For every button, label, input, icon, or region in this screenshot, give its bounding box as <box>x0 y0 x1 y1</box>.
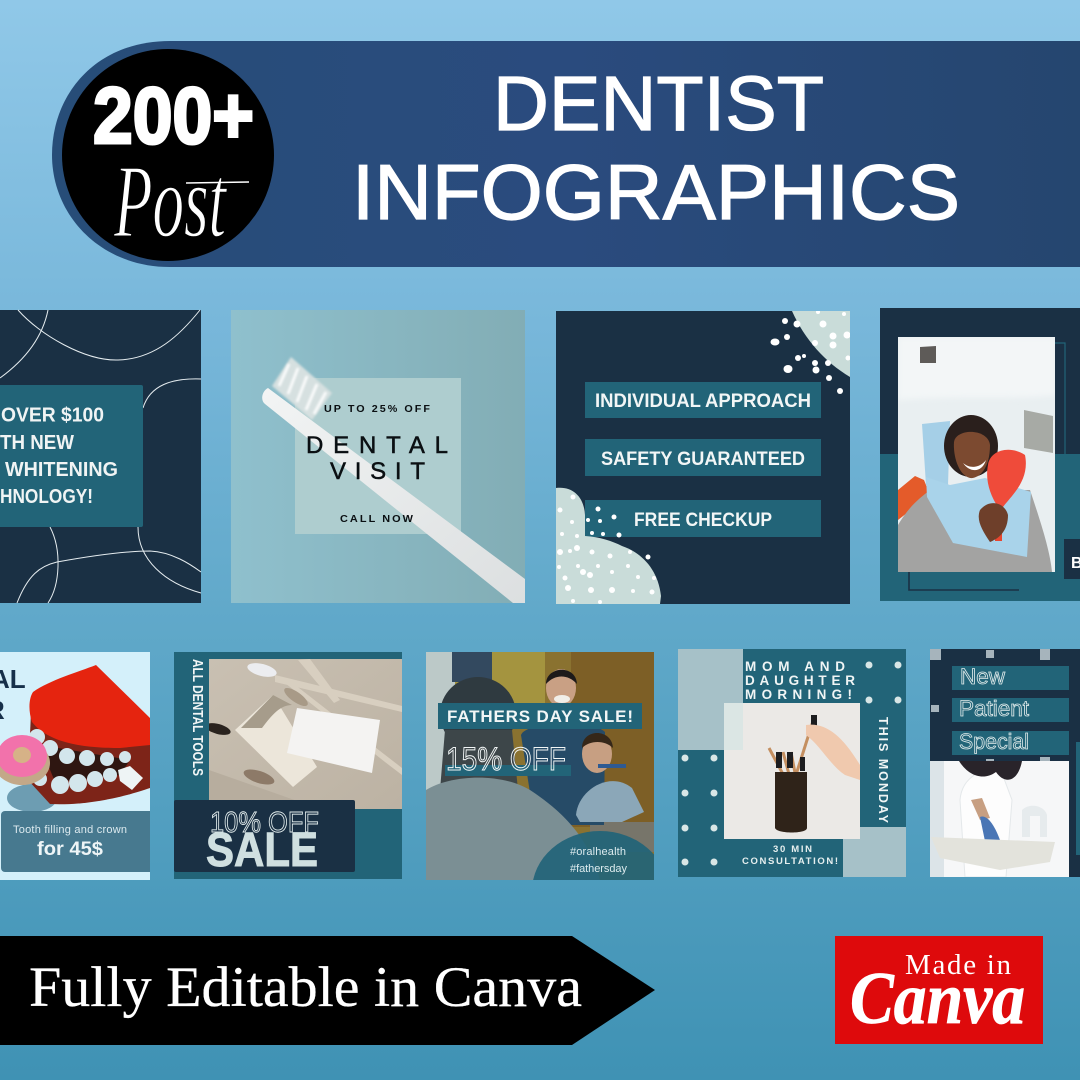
list bars: INDIVIDUAL APPROACH <box>595 391 811 412</box>
grey squares <box>930 649 1050 761</box>
photo: toothbrushes on beige <box>204 659 402 809</box>
bars: Patient <box>959 696 1029 721</box>
title: DENTIST <box>493 61 824 147</box>
translucent square <box>295 378 461 534</box>
panel: mom and daughter morning <box>678 649 906 877</box>
text: mom and daughter morning <box>745 659 855 702</box>
title <box>352 61 960 236</box>
blob: bottom left <box>556 488 661 604</box>
blob: top right <box>770 310 850 394</box>
badge: made in canva: Made in <box>905 949 1012 981</box>
list bars <box>585 382 821 537</box>
price box: for 45$ <box>37 839 103 860</box>
header banner <box>52 41 1080 267</box>
text: consultation: 30 MIN <box>773 844 812 855</box>
hashtags <box>570 846 628 875</box>
offer box: TH NEW <box>0 432 74 454</box>
panel: all dental tools sale <box>174 652 402 879</box>
text: dental visit: DENTAL <box>306 432 448 459</box>
photo: patient smiling <box>898 337 1055 572</box>
sale box: 10% OFF <box>210 807 319 839</box>
banner: fathers day sale <box>438 703 642 729</box>
vertical text: this monday: THIS MONDAY <box>876 717 890 824</box>
panel: dental visit with toothbrush <box>231 310 525 603</box>
offer box <box>0 385 143 527</box>
badge: 200+ Post <box>62 49 274 261</box>
bars <box>952 664 1069 755</box>
text: 15% off: 15% OFF <box>446 741 566 777</box>
badge: made in canva: Canva <box>850 958 1025 1040</box>
sale box <box>174 800 355 877</box>
text: consultation: CONSULTATION! <box>742 856 838 867</box>
text: consultation <box>742 844 838 867</box>
list bars: FREE CHECKUP <box>634 510 772 531</box>
panel: dentures tooth filling <box>0 652 161 880</box>
badge: 200+ Post: Post <box>113 144 227 259</box>
text: dental visit <box>308 436 448 480</box>
price box <box>1 811 161 872</box>
title: INFOGRAPHICS <box>352 148 960 236</box>
offer box: OVER $100 <box>1 404 104 426</box>
panel: patient with mirror <box>880 308 1080 601</box>
icon: toothbrush <box>262 357 525 603</box>
photo: dentist cleaning tray <box>930 761 1069 877</box>
text: mom and daughter morning: MOM AND <box>745 659 845 674</box>
list bars: SAFETY GUARANTEED <box>601 449 805 470</box>
panel: teeth whitening offer <box>0 310 201 603</box>
panel: fathers day sale <box>426 652 654 880</box>
icon: wind-up teeth <box>0 665 150 812</box>
offer box: HNOLOGY! <box>0 486 93 508</box>
hashtags: #oralhealth <box>570 846 626 858</box>
text: call now: CALL NOW <box>340 513 415 525</box>
hashtags: #fathersday <box>570 863 628 875</box>
text: up to 25% off: UP TO 25% OFF <box>324 403 432 415</box>
panel: individual approach list <box>556 310 850 604</box>
offer box: WHITENING <box>5 459 118 481</box>
bars: New <box>960 664 1005 689</box>
dark tag <box>1064 539 1080 579</box>
badge: 200+ Post: 200+ <box>93 71 254 160</box>
text: mom and daughter morning: DAUGHTER <box>745 673 855 688</box>
price box: Tooth filling and crown <box>13 824 127 836</box>
teal arc <box>533 831 654 880</box>
arrow banner <box>0 936 655 1045</box>
banner: fathers day sale: FATHERS DAY SALE! <box>447 707 633 726</box>
bars: Special <box>959 729 1029 754</box>
vertical text: all dental tools: ALL DENTAL TOOLS <box>189 659 206 776</box>
text: mom and daughter morning: MORNING! <box>745 687 852 702</box>
photo: brushes in jar <box>724 703 860 839</box>
text: dental visit: VISIT <box>330 458 425 485</box>
heading fragment <box>0 670 25 719</box>
dots <box>682 662 902 866</box>
badge: made in canva <box>835 936 1043 1044</box>
panel: new patient special <box>930 649 1080 877</box>
arrow banner: Fully Editable in Canva <box>29 956 582 1019</box>
sale box: SALE <box>206 824 318 877</box>
photo: father and sons brushing <box>426 652 654 880</box>
